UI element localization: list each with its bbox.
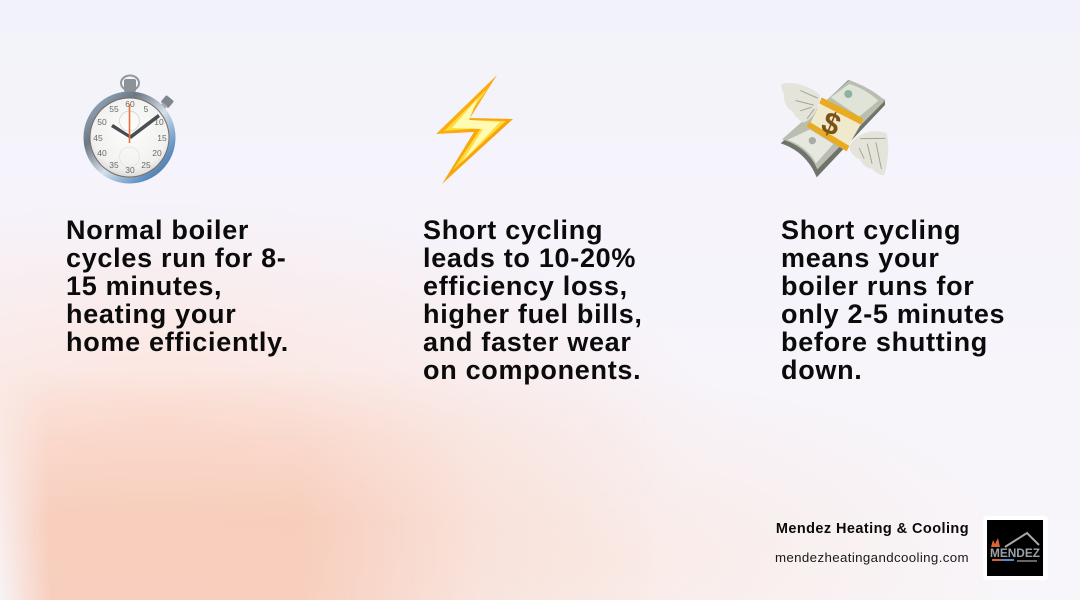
text block: normal cycles: home efficiently. xyxy=(66,327,289,357)
icon: stopwatch: 10 xyxy=(154,117,164,127)
text block: efficiency loss: efficiency loss, xyxy=(423,271,628,301)
text block: short cycling: down. xyxy=(781,355,862,385)
icon: stopwatch: 40 xyxy=(97,148,107,158)
left wing xyxy=(781,83,820,123)
icon: stopwatch: 45 xyxy=(93,133,103,143)
text block: normal cycles xyxy=(66,215,289,357)
text block: efficiency loss: and faster wear xyxy=(423,327,632,357)
text block: efficiency loss: leads to 10-20% xyxy=(423,243,636,273)
text block: normal cycles: cycles run for 8- xyxy=(66,243,286,273)
text block: efficiency loss: higher fuel bills, xyxy=(423,299,643,329)
brand name: Mendez Heating & Cooling xyxy=(776,521,969,537)
text block: short cycling: means your xyxy=(781,243,940,273)
text block: short cycling: only 2-5 minutes xyxy=(781,299,1005,329)
icon: money with wings: $ xyxy=(817,105,845,143)
icon: stopwatch: 60 xyxy=(125,99,135,109)
right wing xyxy=(849,131,888,175)
text block: normal cycles: Normal boiler xyxy=(66,215,249,245)
text block: normal cycles: heating your xyxy=(66,299,236,329)
text block: short cycling: before shutting xyxy=(781,327,988,357)
icon: stopwatch: 20 xyxy=(152,148,162,158)
text block: efficiency loss xyxy=(423,215,643,385)
icon: stopwatch: 50 xyxy=(97,117,107,127)
icon: stopwatch: 15 xyxy=(157,133,167,143)
icon: stopwatch: 55 xyxy=(109,104,119,114)
text block: normal cycles: 15 minutes, xyxy=(66,271,222,301)
logo: MENDEZ xyxy=(990,546,1040,560)
icon: money with wings xyxy=(780,80,888,178)
icon: stopwatch xyxy=(84,74,176,184)
icon: stopwatch: 25 xyxy=(141,160,151,170)
text block: efficiency loss: on components. xyxy=(423,355,641,385)
text block: efficiency loss: Short cycling xyxy=(423,215,603,245)
text block: short cycling xyxy=(781,215,1005,385)
text block: short cycling: Short cycling xyxy=(781,215,961,245)
text block: short cycling: boiler runs for xyxy=(781,271,975,301)
website url: mendezheatingandcooling.com xyxy=(775,550,969,565)
icon: lightning bolt xyxy=(436,75,513,184)
icon: stopwatch: 5 xyxy=(144,104,149,114)
icon: stopwatch: 30 xyxy=(125,165,135,175)
icon: stopwatch: 35 xyxy=(109,160,119,170)
logo xyxy=(983,516,1048,580)
